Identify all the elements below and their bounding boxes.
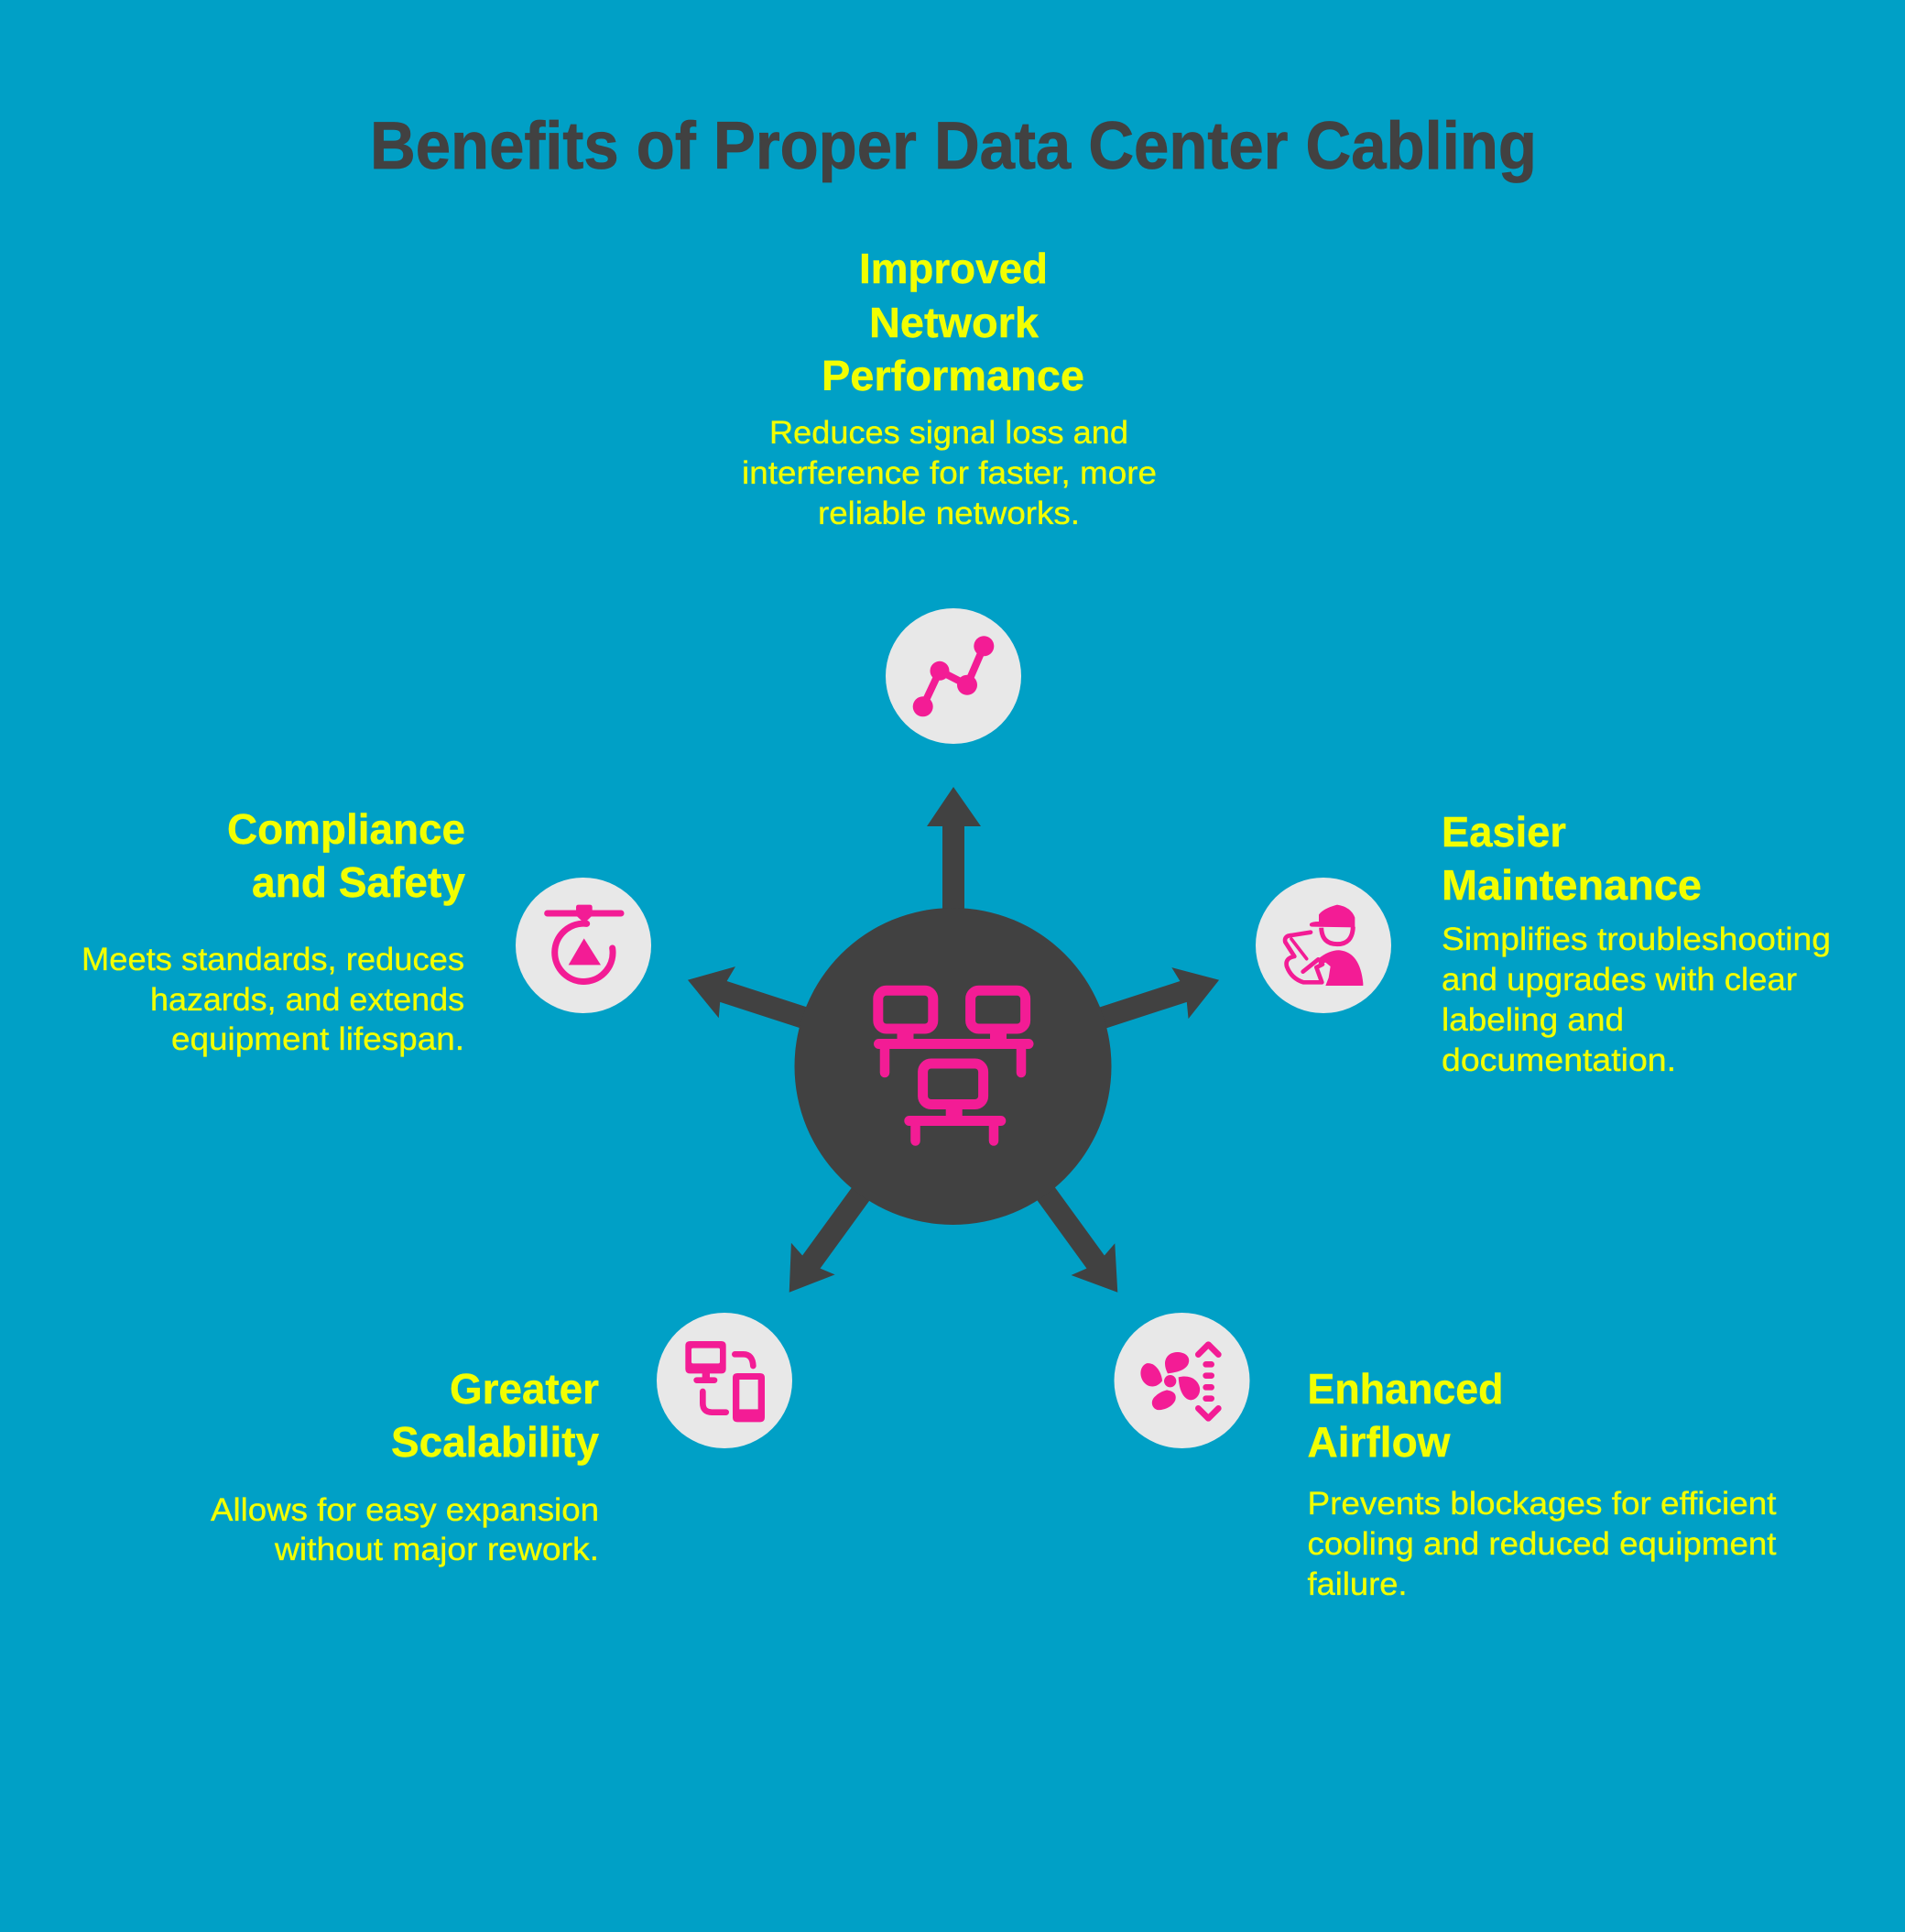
description xyxy=(742,415,1157,531)
description: cooling and reduced equipment xyxy=(1308,1526,1777,1562)
heading xyxy=(227,805,465,906)
arrow: up xyxy=(927,787,981,916)
arrow: lower left xyxy=(767,1172,887,1308)
panel: easier maintenance xyxy=(1256,808,1831,1078)
icon: rising line chart xyxy=(886,608,1021,744)
heading: Greater xyxy=(450,1365,599,1413)
heading: and Safety xyxy=(252,858,465,906)
description: and upgrades with clear xyxy=(1442,962,1797,998)
arrow: upper left xyxy=(680,954,819,1045)
arrow: lower right xyxy=(1019,1173,1139,1308)
description: Reduces signal loss and xyxy=(769,415,1128,451)
hub circle xyxy=(795,908,1112,1225)
icon: networked computers xyxy=(878,990,1029,1141)
title: Benefits of Proper Data Center Cabling xyxy=(370,109,1537,183)
description: failure. xyxy=(1308,1566,1407,1602)
description: without major rework. xyxy=(274,1532,599,1567)
description: hazards, and extends xyxy=(150,982,464,1018)
description: Meets standards, reduces xyxy=(82,942,464,977)
icon: technician with clipboard xyxy=(1256,878,1391,1013)
heading: Maintenance xyxy=(1442,861,1702,909)
heading xyxy=(1442,808,1702,909)
description: Allows for easy expansion xyxy=(211,1492,599,1528)
heading: Compliance xyxy=(227,805,465,853)
heading: Network xyxy=(869,299,1039,346)
heading: Improved xyxy=(859,245,1048,292)
icon: computer and phone sync xyxy=(657,1313,792,1448)
description xyxy=(1308,1486,1777,1602)
heading xyxy=(391,1365,599,1466)
heading xyxy=(822,245,1084,399)
heading: Scalability xyxy=(391,1418,599,1466)
description xyxy=(1442,922,1831,1078)
heading xyxy=(1308,1365,1504,1466)
panel: greater scalability xyxy=(211,1313,792,1567)
panel: improved network performance xyxy=(742,245,1157,744)
description: documentation. xyxy=(1442,1042,1676,1078)
heading: Easier xyxy=(1442,808,1566,856)
heading: Airflow xyxy=(1308,1418,1451,1466)
arrow: upper right xyxy=(1088,955,1227,1046)
description xyxy=(211,1492,599,1567)
description xyxy=(82,942,464,1057)
icon: 3D printer cycle xyxy=(516,878,651,1013)
panel: compliance and safety xyxy=(82,805,651,1057)
panel: enhanced airflow xyxy=(1114,1313,1777,1602)
description: equipment lifespan. xyxy=(171,1021,464,1057)
description: Prevents blockages for efficient xyxy=(1308,1486,1777,1522)
heading: Performance xyxy=(822,352,1084,399)
heading: Enhanced xyxy=(1308,1365,1504,1413)
icon: fan with airflow arrows xyxy=(1114,1313,1249,1448)
description: interference for faster, more xyxy=(742,455,1157,491)
central hub with arrows xyxy=(680,787,1227,1308)
description: reliable networks. xyxy=(818,496,1080,531)
description: labeling and xyxy=(1442,1002,1624,1038)
description: Simplifies troubleshooting xyxy=(1442,922,1831,957)
